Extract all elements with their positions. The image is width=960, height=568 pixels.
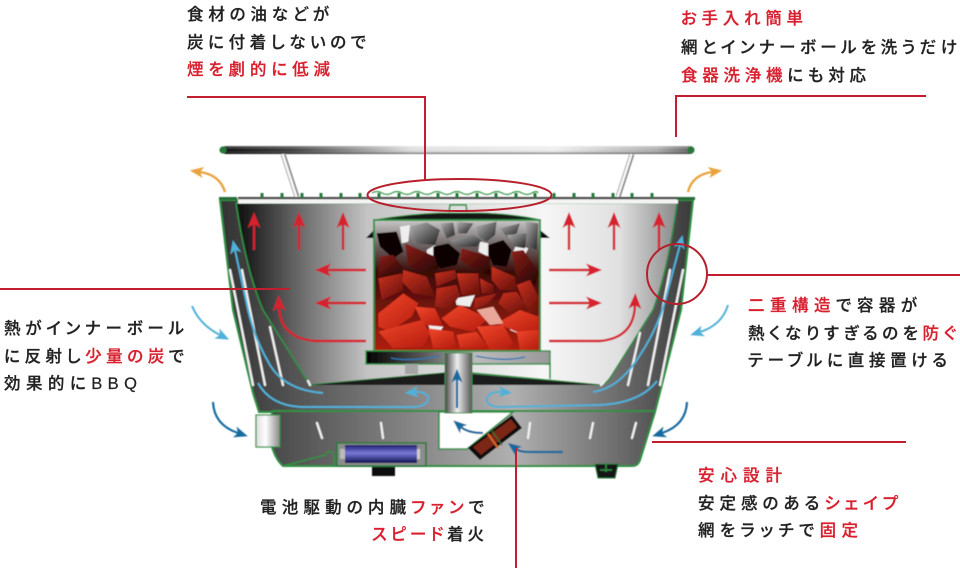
text: double wall: テーブルに直接置ける bbox=[748, 350, 947, 370]
center air tube bbox=[445, 353, 472, 413]
charcoal basket bbox=[374, 220, 540, 351]
text: smoke reduction: 炭に付着しないので bbox=[187, 33, 366, 52]
fan bbox=[468, 415, 522, 460]
text: reflected heat bbox=[4, 318, 184, 393]
text: smoke reduction: 煙を劇的に低減 bbox=[187, 60, 330, 79]
fan wiring bbox=[283, 451, 334, 466]
battery compartment bbox=[337, 443, 426, 466]
red heat arrows bbox=[254, 224, 659, 341]
text: reflected heat: 熱がインナーボール bbox=[4, 318, 184, 338]
inner bowl bbox=[236, 203, 677, 385]
mid red coals bbox=[378, 267, 538, 315]
text: easy cleaning bbox=[681, 9, 957, 85]
black coals bbox=[377, 232, 512, 268]
light gaps bbox=[400, 225, 528, 333]
fan chamber bbox=[439, 412, 513, 449]
dark red coals bbox=[378, 243, 538, 285]
text: battery fan: スピード着火 bbox=[372, 525, 484, 544]
callout circle: double wall bbox=[647, 244, 707, 304]
grill rim bbox=[219, 197, 695, 204]
tray post bbox=[405, 364, 418, 374]
text: safety bbox=[698, 466, 899, 540]
leader line: lower right bbox=[652, 441, 906, 443]
leader line: double wall bbox=[707, 274, 960, 276]
text: safety: 安心設計 bbox=[698, 466, 782, 485]
basket lid bbox=[374, 213, 541, 220]
stove body bbox=[220, 200, 693, 466]
base divider bbox=[272, 410, 655, 412]
wavy net bbox=[372, 192, 538, 194]
text: reflected heat: 効果的にBBQ bbox=[4, 374, 137, 393]
text: double wall: 二重構造 で容器が bbox=[748, 295, 918, 315]
text: battery fan: 電池駆動の内臓 ファン で bbox=[260, 498, 484, 517]
text: battery fan bbox=[260, 498, 484, 544]
hot highlight bbox=[477, 307, 503, 325]
text: safety: 安定感のある シェイプ bbox=[698, 494, 899, 513]
leader line: top left bbox=[187, 97, 425, 180]
dark blue intake arrows bbox=[213, 379, 687, 452]
diagram: stove cross-section bbox=[192, 146, 728, 478]
text: easy cleaning: お手入れ簡単 bbox=[681, 9, 803, 28]
text: easy cleaning: 網とインナーボールを洗うだけ bbox=[681, 38, 957, 57]
text: smoke reduction: 食材の油などが bbox=[187, 4, 330, 24]
bowl wedge shadows bbox=[310, 373, 600, 385]
ash tray bbox=[366, 351, 550, 364]
wall slots bbox=[230, 270, 683, 438]
orange exhaust arrows bbox=[200, 172, 712, 192]
callout ellipse: grill bbox=[368, 179, 552, 211]
feet bbox=[372, 464, 618, 478]
text: smoke reduction bbox=[187, 4, 366, 79]
lid overhangs bbox=[366, 230, 550, 238]
text: reflected heat: に反射し 少量の炭 で bbox=[4, 347, 184, 366]
handle supports bbox=[282, 154, 632, 197]
text: safety: 網をラッチで 固定 bbox=[698, 521, 858, 540]
bright red coals bbox=[378, 293, 538, 350]
ash coals bbox=[410, 222, 538, 250]
leader line: top right bbox=[676, 96, 926, 137]
text: easy cleaning: 食器洗浄機 にも対応 bbox=[681, 66, 866, 85]
basket handle bbox=[449, 205, 467, 212]
text: double wall: 熱くなりすぎるのを 防ぐ bbox=[748, 324, 957, 343]
right tray support bbox=[547, 364, 550, 379]
light blue airflow arrows bbox=[192, 245, 728, 407]
top handle rod bbox=[219, 146, 695, 154]
text: double wall bbox=[748, 295, 957, 370]
air intake cylinder bbox=[256, 415, 280, 447]
grill knobs bbox=[260, 193, 654, 198]
leader line: left bbox=[0, 288, 290, 290]
leader line: bottom bbox=[515, 448, 517, 568]
